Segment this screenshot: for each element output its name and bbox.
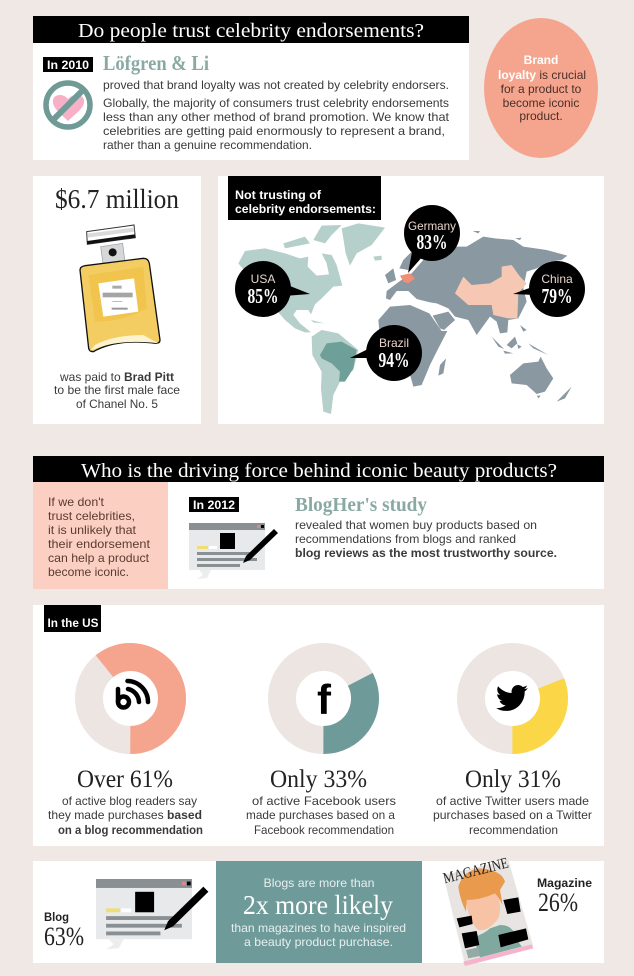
bubble: Germany: Germany <box>408 219 456 233</box>
stat: magazine 26%: 26% <box>538 888 578 917</box>
study text: rather than a genuine recommendation. <box>103 138 312 152</box>
study text <box>103 78 450 152</box>
caption: was paid to Brad Pitt <box>59 370 174 384</box>
stat: Facebook: Facebook recommendation <box>254 823 394 837</box>
study text: less than any other method of brand promotion. We know that <box>103 110 450 124</box>
panel: blog vs magazine <box>33 855 604 966</box>
panel: pink note <box>33 482 168 589</box>
stat: Facebook: of active Facebook users <box>252 794 396 808</box>
stat: Twitter: recommendation <box>469 823 558 837</box>
callout: brand loyalty: product. <box>519 109 563 123</box>
stat: blog: Over 61% <box>77 766 173 793</box>
icon: magazine cover: MAGAZINE <box>442 855 510 887</box>
study text: Globally, the majority of consumers trust celebrity endorsements <box>103 96 449 110</box>
study text: proved that brand loyalty was not created by celebrity endorsers. <box>103 78 449 92</box>
callout: brand loyalty <box>484 18 598 158</box>
year tag 2012 <box>189 497 239 512</box>
callout: 2x more likely: than magazines to have inspired <box>231 921 406 935</box>
bubble: USA: 85% <box>248 284 278 308</box>
bubble: USA: USA <box>251 272 275 286</box>
bubble: Brazil: 94% <box>378 348 410 372</box>
icon: Twitter bird <box>496 685 528 711</box>
panel: pink note: become iconic. <box>48 565 129 579</box>
stat: Facebook <box>246 766 396 837</box>
callout: brand loyalty: for a product to <box>501 82 582 96</box>
panel: Brad Pitt payment <box>33 176 201 424</box>
study text: celebrities are getting paid enormously to represent a brand, <box>103 124 445 138</box>
map: Europe, Africa, Asia, Oceania <box>378 231 572 402</box>
stat: blog: they made purchases based <box>48 808 202 822</box>
year tag 2010 <box>43 57 93 72</box>
study text: recommendations from blogs and ranked <box>295 532 516 546</box>
panel: Löfgren and Li study <box>33 43 469 160</box>
panel: world map <box>218 176 604 424</box>
region tag <box>44 605 101 632</box>
panel: pink note: can help a product <box>48 551 150 565</box>
bubble: Germany <box>404 205 460 273</box>
map label: celebrity endorsements: <box>235 202 376 216</box>
caption: to be the first male face <box>54 383 180 397</box>
amount: $6.7 million <box>55 184 179 214</box>
panel: pink note: If we don't <box>48 495 105 509</box>
study name: BlogHer's study <box>295 494 427 516</box>
icon: perfume bottle <box>80 225 160 352</box>
year tag 2012: In 2012 <box>193 500 235 512</box>
stat: Twitter: Only 31% <box>465 766 561 793</box>
section 2 heading: Who is the driving force behind iconic beauty products? <box>81 460 557 482</box>
icon: blog review <box>189 523 278 579</box>
bubble: Brazil: Brazil <box>379 336 409 350</box>
stat: magazine 26%: Magazine <box>537 876 592 890</box>
callout: 2x more likely: 2x more likely <box>243 890 393 920</box>
donut: Twitter <box>459 645 566 752</box>
stat: magazine 26% <box>537 876 592 917</box>
donut: Facebook <box>268 643 379 754</box>
stat: blog 63%: 63% <box>44 922 84 951</box>
stat: Twitter <box>433 766 592 837</box>
study name: Löfgren & Li <box>103 51 209 75</box>
callout: 2x more likely <box>216 861 422 963</box>
study text <box>295 518 557 560</box>
map label <box>228 176 381 220</box>
bubble: Germany: 83% <box>416 230 448 254</box>
stat: Facebook: Only 33% <box>270 766 367 793</box>
stat: blog: of active blog readers say <box>62 794 197 808</box>
callout: brand loyalty: Brand <box>524 53 558 67</box>
icon: Facebook f: f <box>317 676 332 723</box>
map: Americas <box>238 223 385 414</box>
caption <box>54 370 180 411</box>
section 1 heading <box>33 16 469 43</box>
icon: blog review large <box>96 879 208 949</box>
panel: pink note: trust celebrities, <box>48 509 135 523</box>
study text: blog reviews as the most trustworthy source. <box>295 546 557 560</box>
stat: blog 63%: Blog <box>44 910 69 924</box>
bubble: China: 79% <box>542 284 572 308</box>
year tag 2010: In 2010 <box>47 60 89 72</box>
study text: revealed that women buy products based on <box>295 518 537 532</box>
callout: 2x more likely: a beauty product purchase. <box>244 935 393 949</box>
panel: BlogHer study <box>168 482 604 589</box>
bubble: USA <box>235 261 310 317</box>
panel: pink note: it is unlikely that <box>48 523 137 537</box>
stat: blog 63% <box>44 910 84 951</box>
icon: blog feed <box>118 681 148 708</box>
stat: Twitter: purchases based on a Twitter <box>433 808 592 822</box>
stat: Twitter: of active Twitter users made <box>436 794 589 808</box>
bubble: China: China <box>541 272 573 286</box>
bubble: Brazil <box>350 325 422 381</box>
region tag: In the US <box>48 618 99 630</box>
bubble: China <box>513 261 585 317</box>
stat: Facebook: made purchases based on a <box>246 808 395 822</box>
callout: brand loyalty: loyalty is crucial <box>498 68 586 82</box>
caption: of Chanel No. 5 <box>76 397 158 411</box>
map label: Not trusting of <box>235 188 322 202</box>
section 2 heading <box>33 456 604 482</box>
icon: magazine cover <box>442 855 533 966</box>
stat: blog <box>48 766 203 837</box>
callout: brand loyalty: become iconic <box>503 96 579 110</box>
panel: in the US <box>33 605 604 846</box>
section 1 heading: Do people trust celebrity endorsements? <box>78 20 424 42</box>
callout: 2x more likely: Blogs are more than <box>264 876 374 890</box>
donut: blog <box>72 640 189 757</box>
panel: pink note: their endorsement <box>48 537 151 551</box>
stat: blog: on a blog recommendation <box>58 823 203 837</box>
icon: crossed-out heart <box>46 83 90 127</box>
